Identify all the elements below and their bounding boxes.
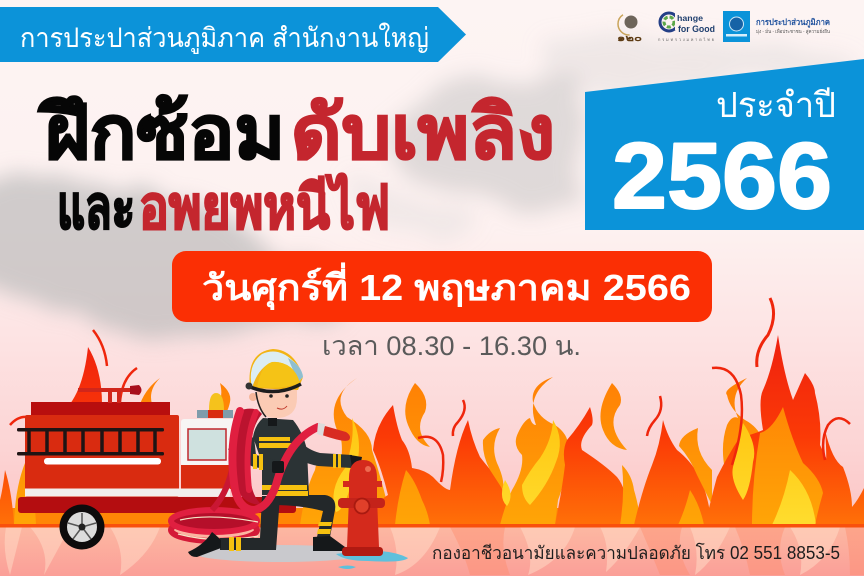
right arm on hydrant <box>290 440 352 468</box>
smoke clouds <box>0 36 850 339</box>
rear leg <box>273 495 335 537</box>
rear leg stripes <box>317 522 332 534</box>
main title: และ <box>57 174 135 241</box>
big right flames <box>705 298 864 525</box>
cab <box>181 419 237 489</box>
red flame and wisp <box>555 383 640 525</box>
red flame cluster <box>368 383 512 525</box>
date pill <box>172 251 712 322</box>
logo: anniversary emblem <box>617 13 643 43</box>
big orange centre flame <box>500 377 568 525</box>
logo: change for good: hange <box>677 13 703 23</box>
logo: PWA <box>723 11 830 42</box>
logo: PWA: มุ่ง - มั่น - เพื่อประชาชน - สู่ความยั่งยืน <box>756 28 830 35</box>
logo: PWA: การประปาส่วนภูมิภาค <box>756 17 830 28</box>
red peak flame <box>634 396 712 525</box>
year panel: 2566 <box>612 123 832 228</box>
siren light <box>197 393 233 418</box>
time: เวลา 08.30 - 16.30 น. <box>322 331 581 361</box>
coiled hose <box>171 470 258 541</box>
helmet <box>246 349 303 392</box>
top banner: การประปาส่วนภูมิภาค สำนักงานใหญ่ <box>20 22 429 54</box>
front leg stripes <box>229 537 241 551</box>
logo: change for good: กรมทรวงมหาดไทย <box>658 37 714 42</box>
hydrant <box>338 460 385 556</box>
main title: ฝึกซ้อม <box>37 91 285 174</box>
white strip <box>25 488 230 496</box>
firefighter <box>171 349 408 569</box>
torso <box>253 418 309 495</box>
floor with reflection <box>0 524 864 576</box>
main title: อพยพหนีไฟ <box>139 172 390 241</box>
year panel <box>585 59 864 230</box>
white body bar <box>44 458 161 464</box>
truck body <box>25 415 179 497</box>
hose over shoulder <box>232 409 318 510</box>
contact footer: กองอาชีวอนามัยและความปลอดภัย โทร 02 551 8853-5 <box>432 542 840 563</box>
left side flames <box>0 330 230 525</box>
fire truck <box>17 385 296 550</box>
logos <box>617 11 830 43</box>
front leg <box>220 496 280 550</box>
roof pipe and nozzle <box>78 385 142 403</box>
top banner <box>0 7 466 62</box>
torso stripes <box>259 437 308 496</box>
date pill: วันศุกร์ที่ 12 พฤษภาคม 2566 <box>202 262 691 311</box>
hose nozzle <box>317 423 350 441</box>
wheel <box>60 504 104 550</box>
logo: anniversary emblem: ๑๒๐ <box>617 33 643 43</box>
rear boot <box>313 536 345 551</box>
hand with hose <box>272 461 284 473</box>
main title <box>37 91 555 241</box>
water puddle <box>336 551 408 569</box>
front boot <box>188 532 221 557</box>
truck roof <box>31 402 170 415</box>
head <box>249 387 297 426</box>
main title: ดับเพลิง <box>291 91 555 174</box>
year panel: ประจำปี <box>716 86 836 125</box>
ground shadow <box>195 545 365 562</box>
logo: change for good <box>658 13 715 42</box>
flames behind hydrant <box>300 378 392 525</box>
flames wall <box>0 298 864 525</box>
ladder <box>17 428 164 456</box>
logo: change for good: for Good <box>678 24 715 34</box>
chassis <box>18 497 296 513</box>
left arm <box>228 437 284 472</box>
